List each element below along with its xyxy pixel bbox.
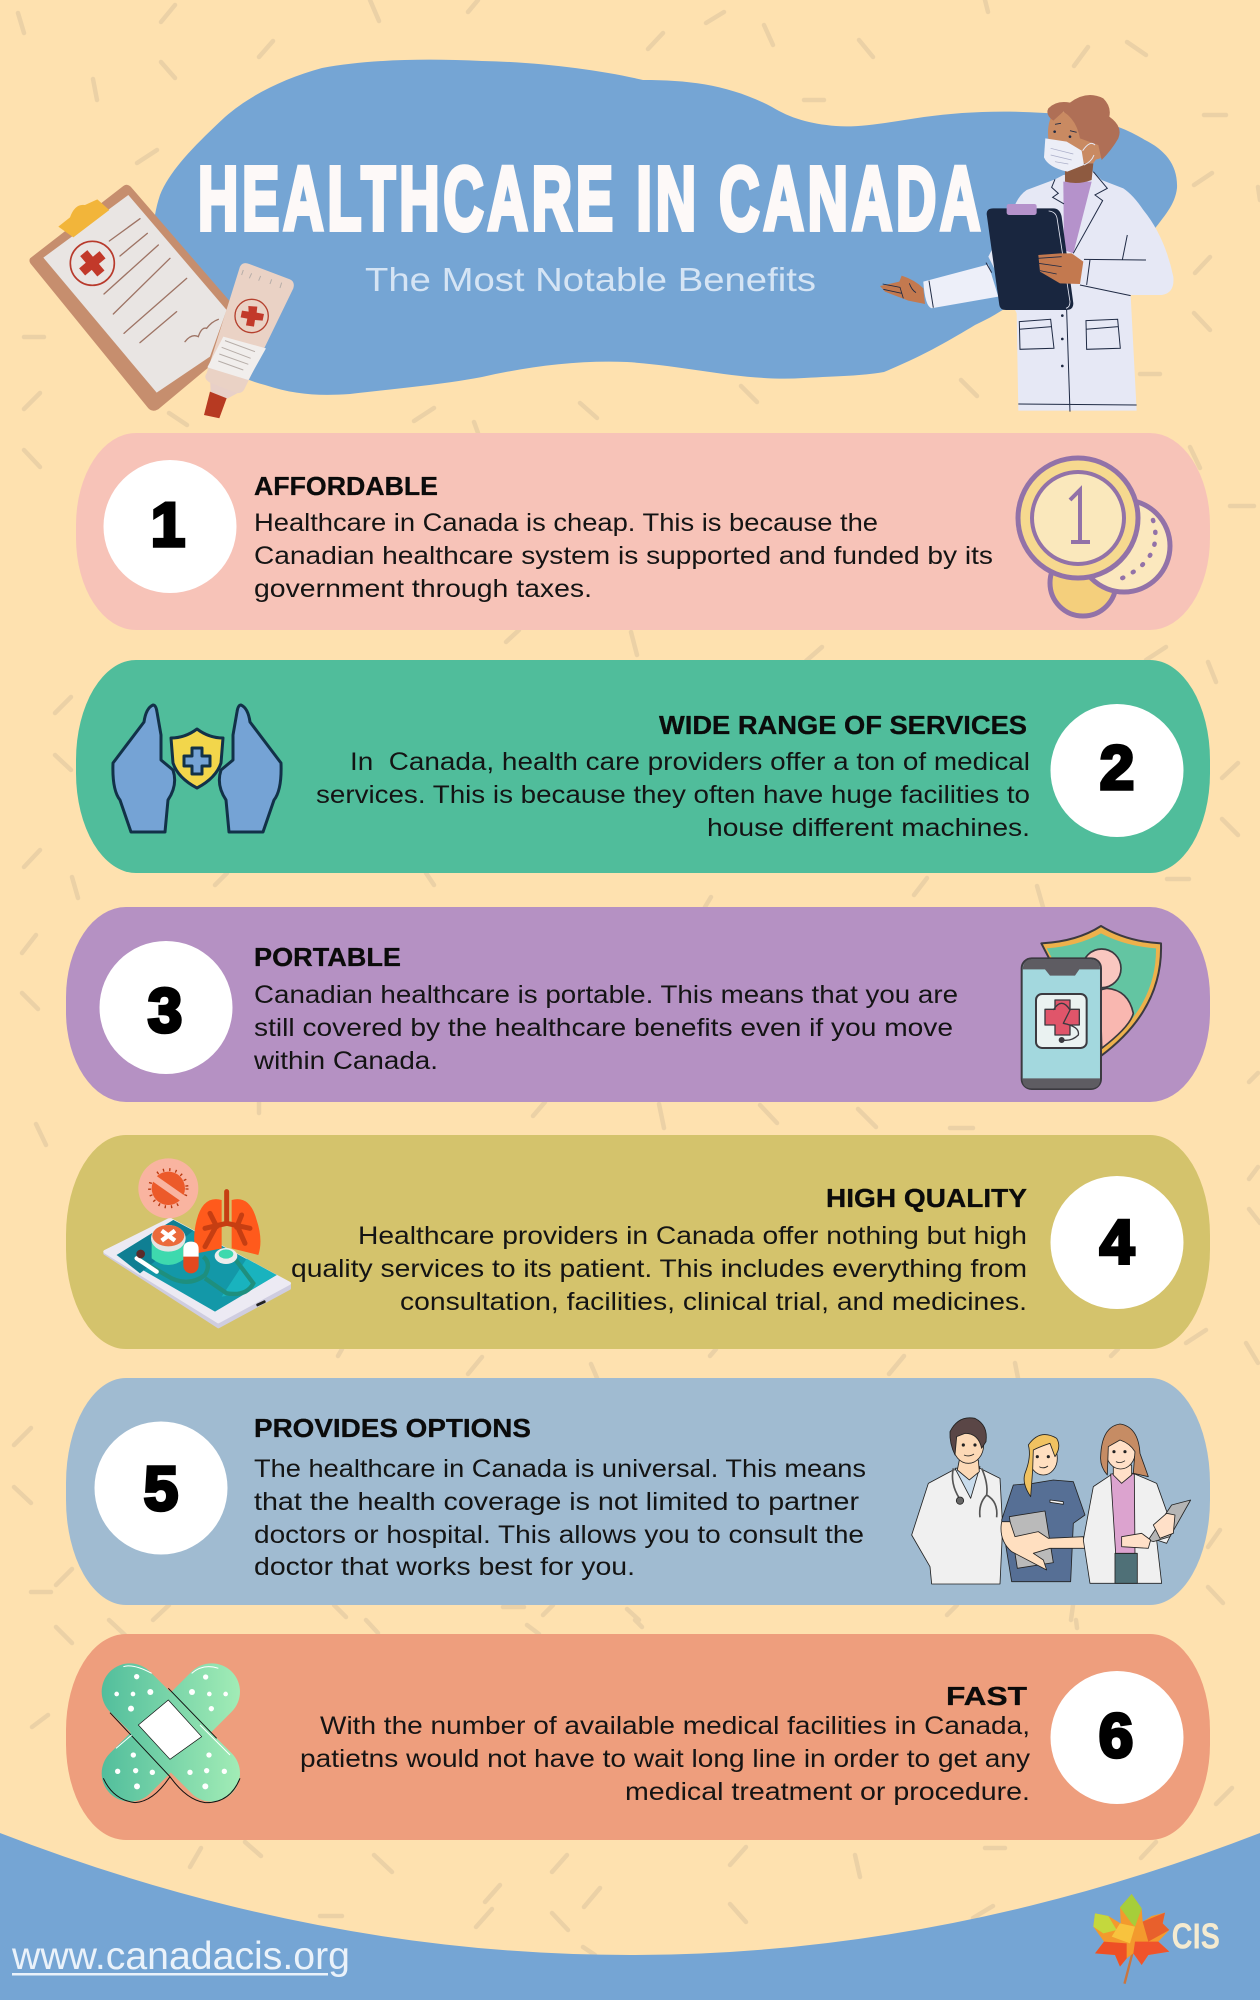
number badge 4 [1050, 1176, 1184, 1309]
text: services body [316, 748, 1030, 842]
number badge 3: 3 [148, 977, 182, 1046]
icon: coins [1018, 458, 1170, 616]
logo: maple leaf and CIS [1093, 1894, 1220, 1984]
text: fast body: medical treatment or procedure. [625, 1778, 1030, 1806]
text: services body: house different machines. [707, 814, 1030, 842]
text: options body [254, 1455, 866, 1581]
text: affordable body [254, 509, 993, 603]
text: services body: In Canada, health care providers offer a ton of medical [350, 748, 1030, 776]
text: affordable body: Canadian healthcare system is supported and funded by its [254, 542, 993, 570]
text: fast body: With the number of available medical facilities in Canada, [320, 1712, 1030, 1740]
icon: clipboard and ointment tube [29, 185, 294, 418]
panel: 2 wide range of services [76, 660, 1210, 873]
text: quality body: consultation, facilities, clinical trial, and medicines. [400, 1288, 1027, 1316]
heading: portable: PORTABLE [254, 942, 401, 972]
text: portable body: still covered by the healthcare benefits even if you move [254, 1014, 953, 1042]
text: portable body: within Canada. [253, 1047, 438, 1075]
number badge 5 [94, 1422, 228, 1554]
number badge 6: 6 [1099, 1702, 1133, 1771]
heading: affordable: AFFORDABLE [254, 471, 438, 501]
number badge 2: 2 [1100, 734, 1134, 803]
number badge 1: 1 [151, 491, 185, 560]
footer band [0, 1833, 1260, 2000]
heading: provides options: PROVIDES OPTIONS [254, 1413, 531, 1443]
heading: high quality: HIGH QUALITY [826, 1183, 1027, 1213]
heading: wide range of services: WIDE RANGE OF SERVICES [659, 710, 1027, 740]
text: fast body [300, 1712, 1031, 1806]
number badge 5: 5 [144, 1455, 178, 1524]
panel: 3 portable [66, 907, 1210, 1102]
text: options body: The healthcare in Canada is universal. This means [254, 1455, 866, 1483]
panel: 6 fast [66, 1634, 1210, 1840]
icon: three medical professionals [912, 1418, 1191, 1584]
icon: crossed bandages [103, 1666, 240, 1803]
text: portable body [253, 981, 958, 1075]
panel: 4 high quality [66, 1135, 1210, 1349]
panel: 5 provides options [66, 1378, 1210, 1605]
number badge 2 [1050, 704, 1184, 837]
text: portable body: Canadian healthcare is portable. This means that you are [254, 981, 958, 1009]
text: fast body: patietns would not have to wait long line in order to get any [300, 1745, 1031, 1773]
text: quality body: Healthcare providers in Canada offer nothing but high [358, 1222, 1027, 1250]
text: services body: services. This is because they often have huge facilities to [316, 781, 1030, 809]
number badge 1 [104, 460, 236, 593]
title: HEALTHCARE IN CANADA [198, 148, 980, 249]
text: quality body [291, 1222, 1027, 1316]
logo: maple leaf and CIS: CIS [1172, 1915, 1220, 1956]
text: options body: that the health coverage is not limited to partner [254, 1488, 859, 1516]
text: options body: doctor that works best for you. [254, 1553, 635, 1581]
icon: doctor with clipboard [880, 95, 1173, 412]
subtitle: The Most Notable Benefits [365, 261, 816, 298]
number badge 3 [100, 941, 232, 1074]
number badge 4: 4 [1100, 1208, 1135, 1277]
icon: phone with lungs and virus [105, 1158, 289, 1327]
text: affordable body: Healthcare in Canada is cheap. This is because the [254, 509, 878, 537]
header blob [153, 60, 1177, 395]
panel: 1 affordable [76, 433, 1210, 630]
website url: www.canadacis.org [11, 1935, 350, 1978]
heading: fast: FAST [946, 1681, 1027, 1711]
text: options body: doctors or hospital. This allows you to consult the [254, 1521, 864, 1549]
icon: phone and shield [1022, 926, 1161, 1089]
icon: hands and shield [113, 705, 281, 832]
number badge 6 [1050, 1671, 1184, 1804]
text: quality body: quality services to its patient. This includes everything from [291, 1255, 1027, 1283]
text: affordable body: government through taxes. [254, 575, 592, 603]
